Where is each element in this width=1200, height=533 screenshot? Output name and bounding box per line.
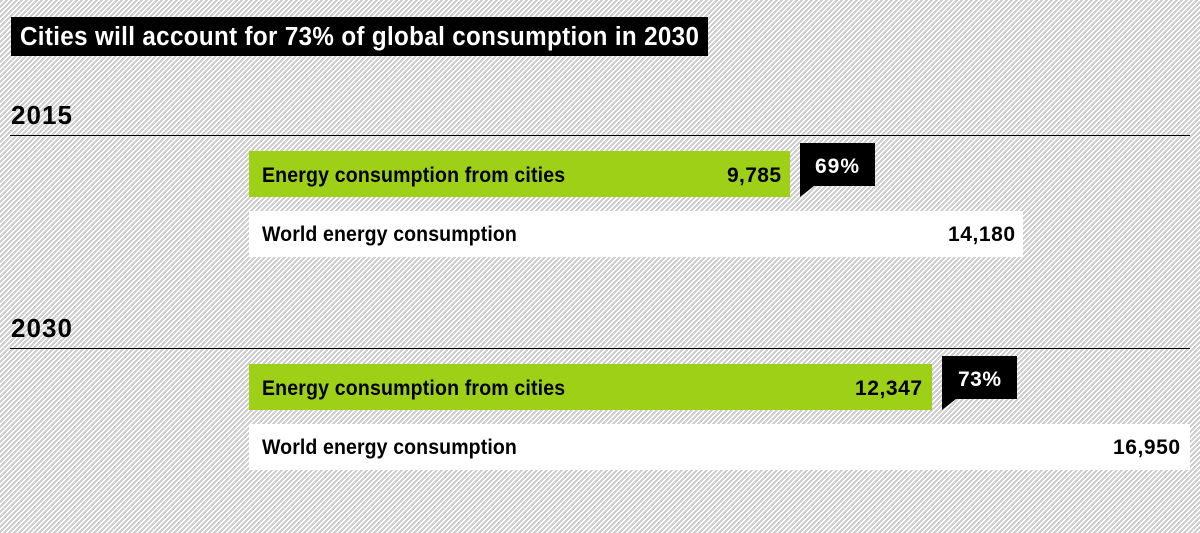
title: Cities will account for 73% of global consumption in 2030: [20, 22, 699, 51]
callout: 69%: 69%: [815, 155, 859, 178]
bar: energy consumption from cities 2015: 9,785: [727, 164, 781, 187]
bar: energy consumption from cities 2015: [249, 151, 790, 197]
callout: 73%: 73%: [958, 368, 1001, 391]
bar: energy consumption from cities 2030: Energy consumption from cities: [262, 377, 565, 400]
bar: world energy consumption 2015: 14,180: [948, 223, 1015, 246]
bar: energy consumption from cities 2015: Energy consumption from cities: [262, 164, 565, 187]
callout: 69%: [800, 143, 875, 197]
bar: energy consumption from cities 2030: 12,347: [855, 377, 922, 400]
bar: world energy consumption 2030: 16,950: [1113, 436, 1180, 459]
heading: 2030: 2030: [11, 313, 72, 343]
bar: world energy consumption 2030: World energy consumption: [262, 436, 517, 459]
callout: 73%: [942, 356, 1017, 410]
bar: energy consumption from cities 2030: [249, 364, 932, 410]
bar: world energy consumption 2015: [249, 211, 1023, 257]
bar: world energy consumption 2015: World energy consumption: [262, 223, 517, 246]
heading: 2015: 2015: [11, 100, 72, 130]
panel: 2015: [10, 100, 1190, 257]
panel: 2030: [10, 313, 1190, 470]
bar: world energy consumption 2030: [249, 424, 1190, 470]
